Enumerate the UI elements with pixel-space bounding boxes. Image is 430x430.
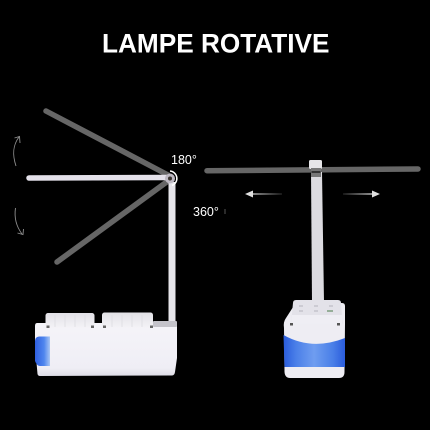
right arrow pointing left bbox=[245, 190, 282, 198]
left lamp: pivot and rotation mark bbox=[165, 171, 177, 186]
left lamp: horizontal arm bbox=[29, 175, 168, 181]
right body bbox=[284, 303, 345, 378]
left lamp: lower ghost arm bbox=[57, 181, 168, 262]
icon: up rotation arrow bbox=[14, 136, 20, 166]
right lamp: head joint bbox=[309, 160, 322, 177]
right blue water tank bbox=[284, 335, 345, 367]
faint tick beside 360 label bbox=[224, 209, 226, 214]
right arrow pointing right bbox=[343, 190, 380, 198]
left tray two bbox=[102, 312, 153, 328]
icon: down rotation arrow bbox=[15, 208, 24, 234]
right lamp: horizontal arm bbox=[207, 169, 418, 171]
left blue water tank bbox=[35, 336, 50, 366]
left lamp: base bbox=[35, 312, 177, 376]
label: 180 degrees: 180° bbox=[171, 153, 197, 167]
label: 360 degrees: 360° bbox=[193, 205, 219, 219]
title: LAMPE ROTATIVE bbox=[102, 28, 330, 58]
right lamp: pole bbox=[311, 172, 324, 302]
right tray bbox=[290, 300, 342, 326]
right lamp: base bbox=[284, 300, 345, 378]
left lamp: upper ghost arm bbox=[46, 111, 168, 175]
left lamp: pole bbox=[168, 182, 176, 328]
left tray one bbox=[46, 313, 94, 328]
